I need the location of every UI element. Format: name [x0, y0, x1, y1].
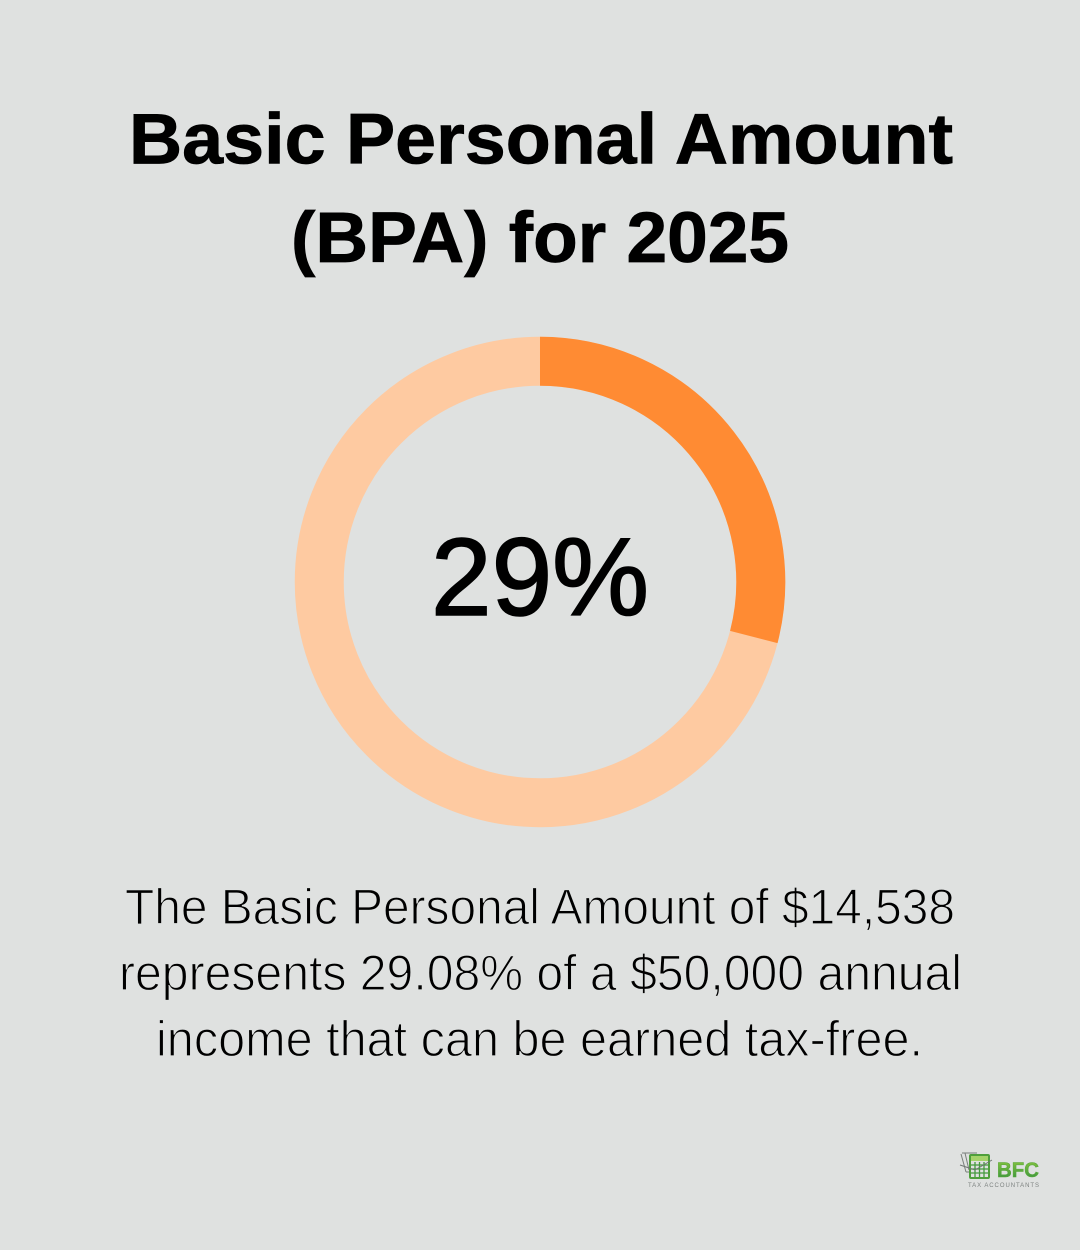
logo tagline: TAX ACCOUNTANTS — [968, 1183, 1039, 1189]
icon: calculator and paper — [960, 1153, 992, 1178]
donut chart: 29% — [319, 361, 761, 803]
description text: income that can be earned tax-free. — [156, 1011, 923, 1067]
title: (BPA) for 2025 — [291, 199, 789, 278]
description text: represents 29.08% of a $50,000 annual — [119, 945, 962, 1001]
description text: The Basic Personal Amount of $14,538 — [125, 879, 955, 935]
logo: BFC Tax Accountants — [960, 1153, 1039, 1189]
logo wordmark: BFC — [997, 1159, 1039, 1182]
title — [129, 100, 953, 278]
donut value: 29% — [431, 516, 649, 639]
title: Basic Personal Amount — [129, 100, 953, 180]
description text — [119, 879, 962, 1067]
